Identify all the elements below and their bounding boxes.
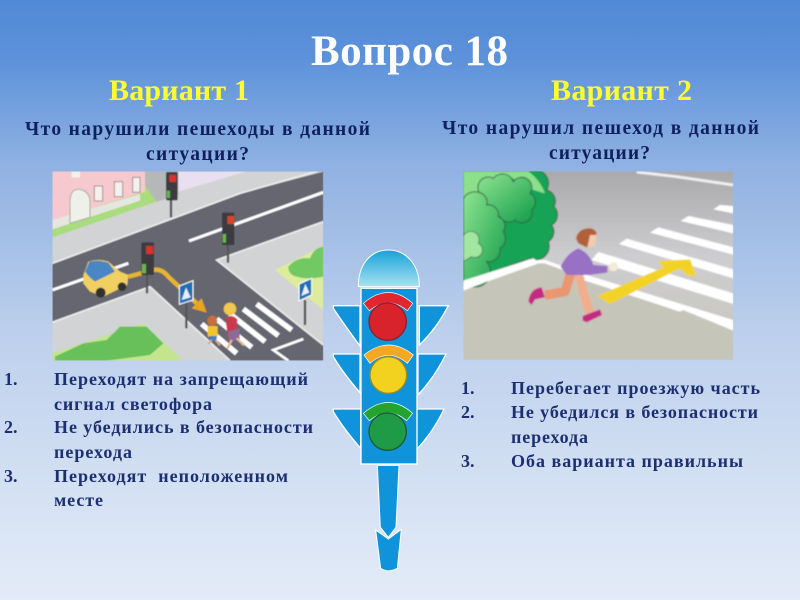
panel: option 2 [442, 74, 760, 471]
answers: option 1 [4, 369, 313, 510]
pole [377, 465, 399, 537]
answers: option 1: Переходят на запрещающий [54, 369, 308, 389]
answers: option 2: перехода [511, 427, 588, 447]
answers: option 1: сигнал светофора [54, 394, 212, 414]
icon: traffic light [333, 250, 448, 571]
answers: option 2: Перебегает проезжую часть [511, 378, 760, 398]
red signal [363, 292, 413, 340]
answers: option 1: Не убедились в безопасности [54, 417, 313, 437]
bush [463, 170, 557, 287]
signs [179, 281, 193, 304]
answers: option 1: 1. [4, 369, 18, 389]
illustration: running pedestrian [463, 170, 733, 360]
illustration: intersection with pedestrians [52, 171, 323, 361]
lawn and building [52, 183, 157, 237]
car [83, 260, 128, 297]
lawns [52, 323, 183, 361]
answers: option 1: перехода [54, 442, 132, 462]
runner [545, 273, 571, 295]
body [361, 288, 417, 464]
yellow signal [364, 345, 413, 393]
small traffic lights [166, 172, 178, 200]
panel: option 1 [4, 74, 370, 510]
question: option 1: Что нарушили пешеходы в данной [25, 119, 370, 140]
road centre line [52, 263, 128, 290]
answers: option 2: 3. [461, 451, 474, 471]
answers: option 1: 2. [4, 417, 18, 437]
answers: option 1: 3. [4, 466, 18, 486]
answers: option 2: 2. [461, 402, 474, 422]
road [52, 172, 323, 361]
zebra [202, 304, 292, 353]
question: option 1 [25, 119, 370, 165]
zebra stripes [583, 205, 733, 331]
side visors [333, 306, 448, 449]
question: option 2: ситуации? [549, 143, 650, 164]
answers: option 2: Оба варианта правильны [511, 451, 743, 471]
poles [147, 200, 305, 328]
heading: option 1: Вариант 1 [109, 74, 249, 107]
answers: option 2 [461, 378, 760, 471]
answers: option 1: месте [54, 490, 103, 510]
answers: option 2: 1. [461, 378, 474, 398]
pedestrians [224, 303, 236, 315]
heading: option 2: Вариант 2 [551, 74, 692, 107]
question: option 2: Что нарушил пешеход в данной [442, 118, 759, 139]
title: Вопрос 18 [311, 28, 508, 75]
green signal [363, 402, 413, 450]
answers: option 1: Переходят неположенном [54, 466, 288, 486]
answers: option 2: Не убедился в безопасности [511, 402, 758, 422]
dome [358, 250, 419, 287]
question: option 2 [442, 118, 759, 164]
question: option 1: ситуации? [146, 144, 249, 165]
route arrow [128, 270, 197, 303]
yellow arrow [597, 259, 697, 304]
